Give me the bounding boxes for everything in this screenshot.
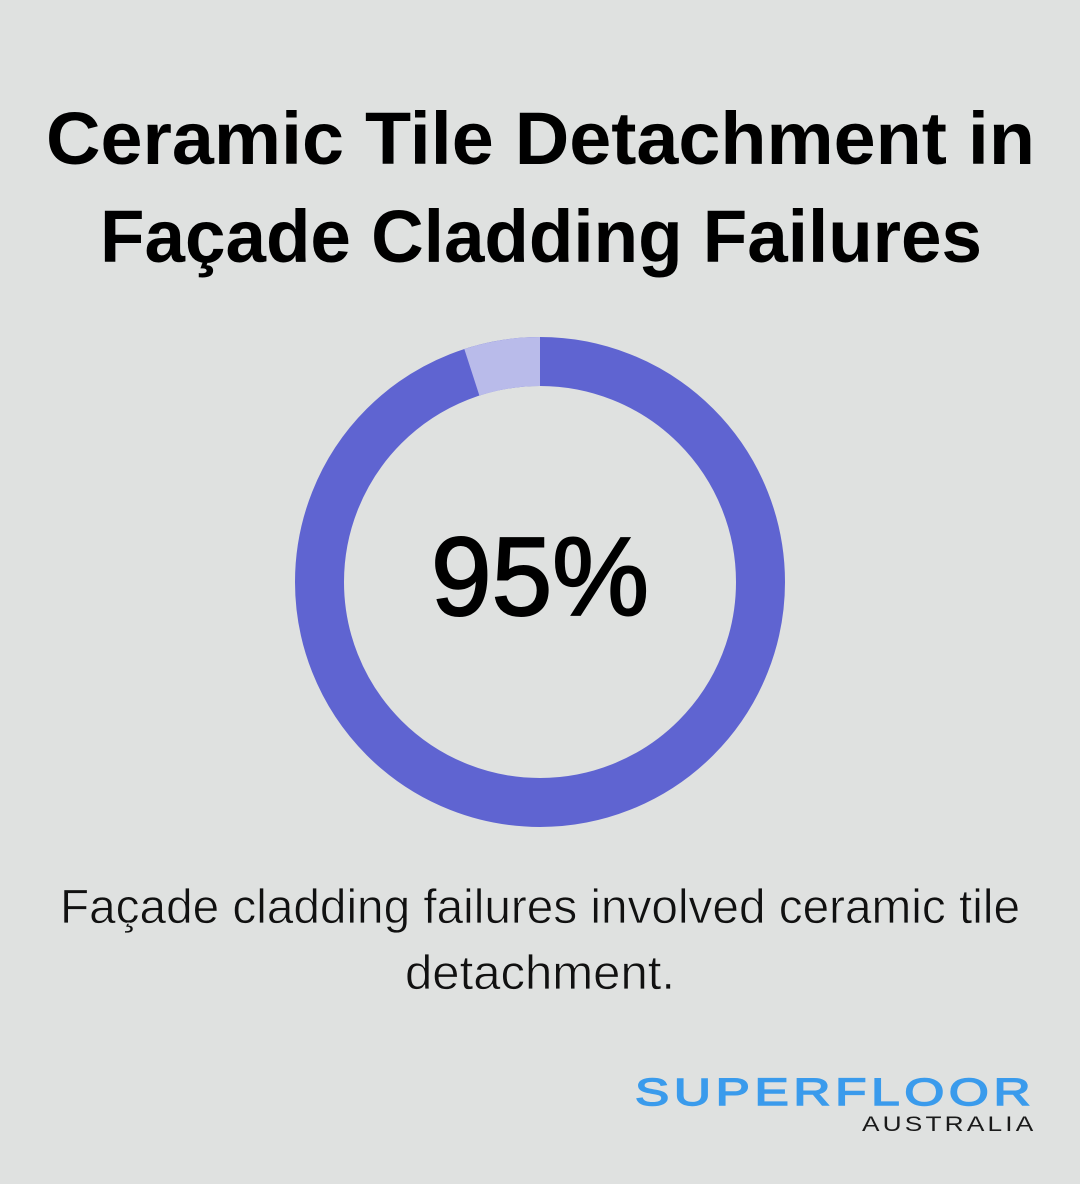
- title: Façade Cladding Failures: [100, 195, 982, 278]
- donut value: 95%: [431, 515, 649, 639]
- donut chart: 95%: [320, 337, 760, 802]
- description text: Façade cladding failures involved ceramic tile: [60, 881, 1020, 934]
- logo subtitle: AUSTRALIA: [862, 1112, 1033, 1136]
- logo: Superfloor Australia: [635, 1070, 1033, 1136]
- donut segment: remaining 5%: [464, 337, 540, 396]
- description text: [60, 881, 1020, 1000]
- donut segment: 95% share: [320, 362, 760, 802]
- title: [46, 97, 1035, 278]
- description text: detachment.: [405, 947, 675, 1000]
- logo wordmark: SUPERFLOOR: [635, 1070, 1031, 1113]
- title: Ceramic Tile Detachment in: [46, 97, 1035, 180]
